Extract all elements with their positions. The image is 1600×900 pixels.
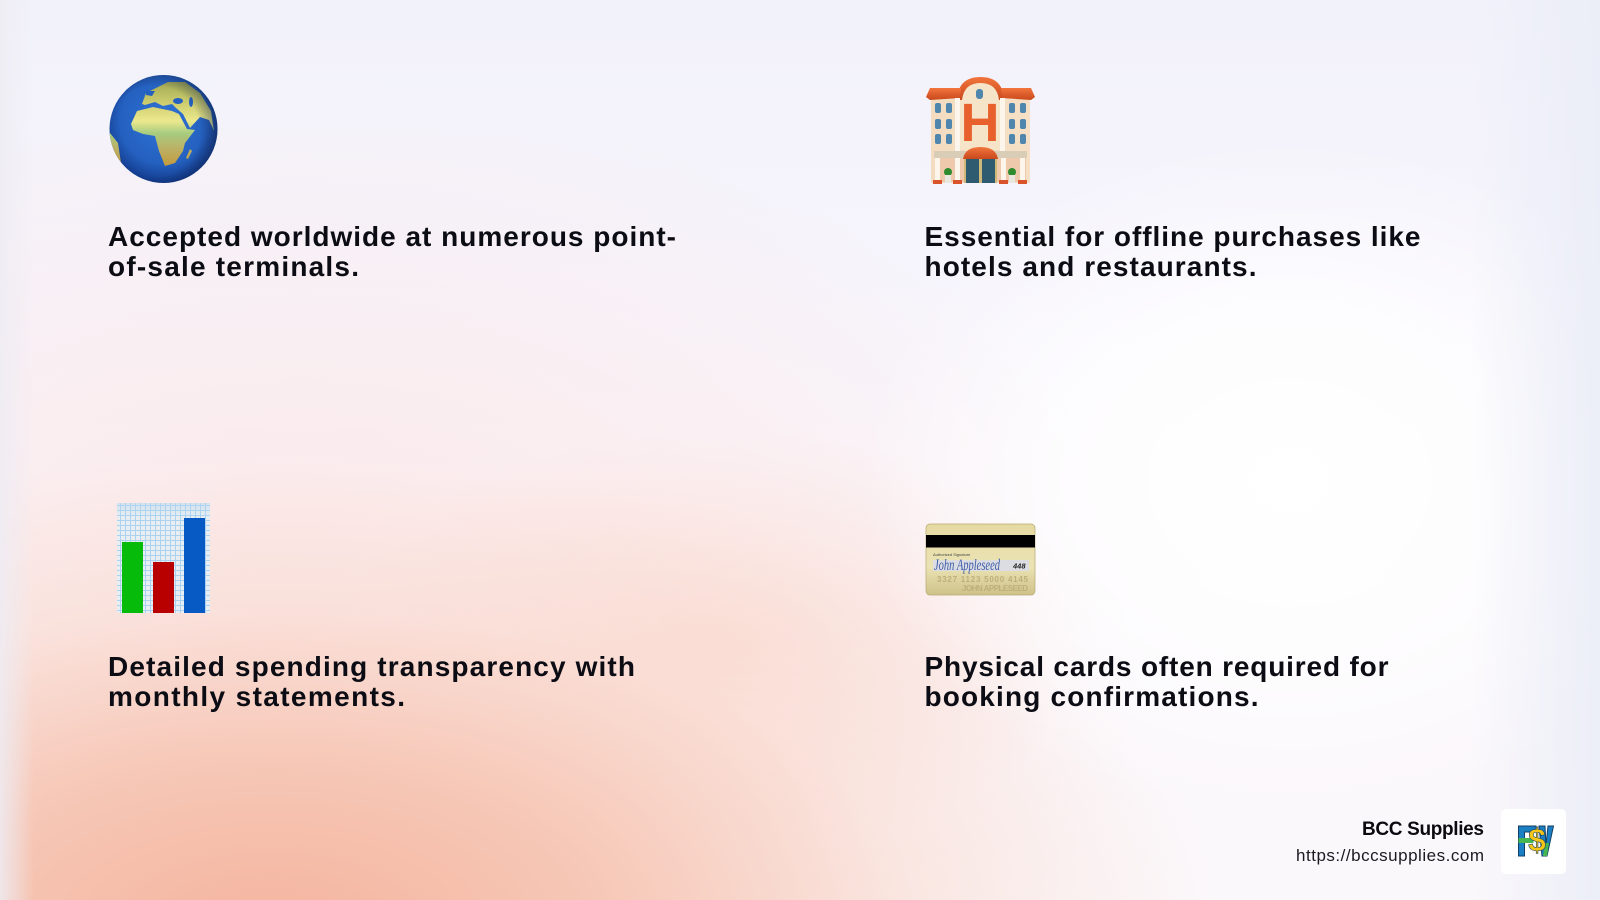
icon: hotel: H <box>960 93 1000 153</box>
text: booking confirmations: Physical cards often required for <box>924 651 1389 682</box>
text: booking confirmations <box>924 651 1389 712</box>
footer: brand <box>1296 809 1566 874</box>
brand url: https://bccsupplies.com <box>1296 846 1484 865</box>
icon: credit card: 3327 1123 5000 4145 <box>937 575 1029 584</box>
text: booking confirmations: booking confirmations. <box>924 681 1258 712</box>
panel: worldwide acceptance <box>108 75 676 282</box>
panel: offline purchases <box>924 77 1420 282</box>
text: offline purchases: Essential for offline purchases like <box>924 221 1420 252</box>
text: spending transparency: monthly statements. <box>108 681 405 712</box>
text: worldwide acceptance <box>108 221 676 282</box>
text: worldwide acceptance: of-sale terminals. <box>108 251 359 282</box>
text: spending transparency: Detailed spending transparency with <box>108 651 635 682</box>
icon: credit card: 448 <box>1012 562 1026 570</box>
text: spending transparency <box>108 651 635 712</box>
text: offline purchases: hotels and restaurants. <box>924 251 1256 282</box>
icon: bar chart <box>117 503 210 613</box>
icon: globe <box>108 75 218 183</box>
panel: booking confirmations <box>924 524 1389 712</box>
icon: credit card <box>926 524 1035 595</box>
icon: credit card: JOHN APPLESEED <box>962 584 1028 593</box>
panel: spending transparency <box>108 503 635 712</box>
logo <box>1501 809 1566 874</box>
logo: $ <box>1528 822 1546 858</box>
text: worldwide acceptance: Accepted worldwide at numerous point- <box>108 221 676 252</box>
icon: credit card: Authorized Signature <box>933 552 971 557</box>
icon: credit card: John Appleseed <box>934 557 1001 574</box>
brand name: BCC Supplies <box>1362 819 1484 840</box>
text: offline purchases <box>924 221 1420 282</box>
icon: hotel <box>926 77 1035 184</box>
